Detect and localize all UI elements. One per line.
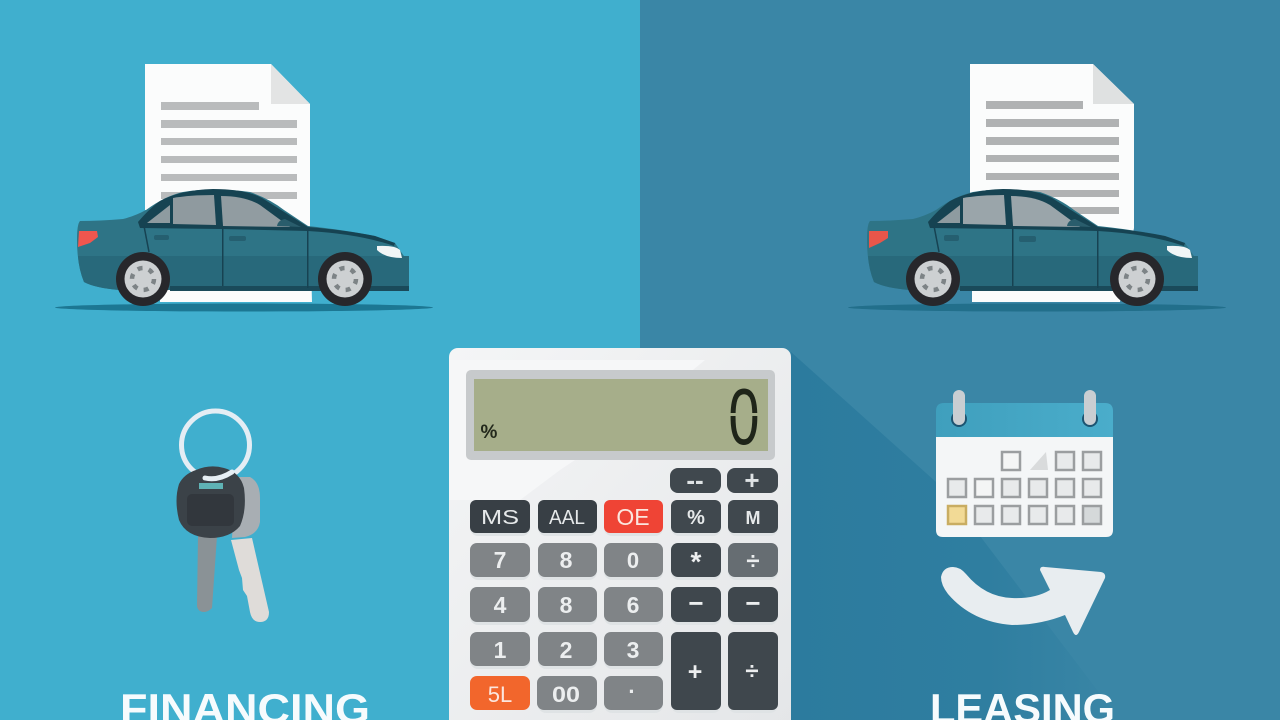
icon: car keys [176, 411, 269, 622]
car: leasing [848, 189, 1226, 312]
keys: row 4: 3 [627, 637, 639, 663]
keys: bottom row: 00 [552, 682, 580, 707]
icon: calendar [936, 390, 1113, 537]
keys: row 1: OE [616, 504, 650, 530]
keys: top row: + [744, 465, 760, 495]
display mark: % [481, 422, 498, 443]
keys: row 3 [470, 587, 778, 622]
keys: row 2: 0 [627, 548, 639, 573]
keys: row 2: ÷ [746, 548, 760, 575]
keys: row 2 [470, 543, 778, 577]
keys: row 1: AAL [549, 507, 585, 529]
display [466, 370, 775, 461]
keys: row 3: − [745, 588, 761, 618]
keys: tall operators: + [688, 658, 702, 686]
panel: financing background [0, 0, 640, 720]
keys: row 2: 7 [494, 547, 506, 573]
calculator body [449, 348, 791, 720]
calculator cast shadow [791, 352, 1120, 720]
keys: bottom row [470, 676, 663, 710]
keys: tall operators [671, 632, 778, 710]
keys: bottom row: 5L [488, 682, 512, 707]
keys: top row [670, 465, 778, 495]
keypad [470, 465, 778, 713]
keys: row 4: 2 [560, 637, 572, 663]
car: financing [55, 189, 433, 312]
calculator [449, 348, 791, 720]
keys: row 2: * [691, 546, 702, 577]
keys: row 3: 4 [494, 592, 507, 618]
keys: row 3: 8 [560, 592, 573, 618]
keys: row 1 [470, 500, 778, 533]
keys: row 4 [470, 632, 663, 666]
keys: bottom row: · [628, 679, 636, 704]
keys: top row: -- [686, 465, 704, 495]
keys: row 4: 1 [494, 637, 507, 663]
keys: row 1: MS [481, 507, 519, 529]
calendar day grid [948, 452, 1101, 524]
keys: row 3: − [688, 588, 704, 618]
keys: tall operators: ÷ [745, 658, 759, 685]
keys: row 1: % [687, 507, 705, 529]
keys: row 2: 8 [560, 547, 573, 573]
document: financing [145, 64, 312, 302]
document: leasing [970, 64, 1134, 302]
keys: row 3: 6 [627, 592, 639, 618]
arrow [941, 567, 1105, 635]
panel: leasing background [640, 0, 1280, 720]
display digit: 0 [728, 371, 760, 461]
keys: row 1: M [746, 508, 760, 528]
